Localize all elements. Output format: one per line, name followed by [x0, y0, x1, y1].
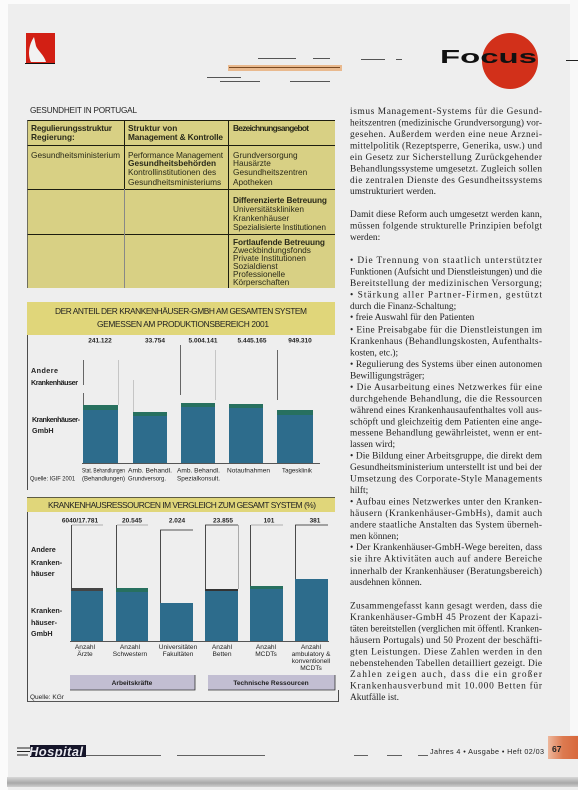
footer: page number block [548, 736, 578, 759]
article text column: • Regulierung des Systems über einen autonomen [350, 360, 542, 370]
table row: continuing care: Körperschaften [233, 277, 290, 287]
article text column: • Die Ausarbeitung eines Netzwerkes für eine [350, 382, 542, 393]
header rules and orange bar [207, 58, 402, 82]
article text column: • Der Krankenhäuser-GmbH-Wege bereiten, dass [350, 543, 542, 553]
category labels: Betten [212, 651, 232, 658]
table heading: GESUNDHEIT IN PORTUGAL [30, 106, 137, 115]
category labels: Stat. Behandlungen [82, 468, 125, 474]
article text column: innerhalb der Krankenhäuser (Beratungsbereich) [350, 566, 542, 577]
article text column: häusern (Krankenhäuser-GmbHs), damit auch [350, 508, 542, 519]
article text column: Zusammengefasst kann gesagt werden, dass die [350, 600, 542, 612]
table row: differentiated care [233, 195, 327, 232]
table row: ministry and primary care: Hausärzte [233, 158, 271, 168]
category labels: konventionell [292, 658, 331, 665]
button: Arbeitskräfte: Arbeitskräfte [112, 680, 153, 687]
top values: 5.004.141 [189, 338, 218, 344]
table row: ministry and primary care: Gesundheitszentren [233, 167, 308, 177]
chart title band: DER ANTEIL DER KRANKENHÄUSER-GMBH AM GESAMTEN SYSTEM [55, 306, 307, 316]
footer: page number block: 67 [552, 744, 562, 754]
series labels: Krankenhäuser- [32, 415, 81, 424]
category labels: MCDTs [255, 651, 278, 658]
table header row: Regierung: [31, 132, 75, 142]
article text column: schöpft und gleichzeitig dem Patienten eine ange- [350, 416, 542, 427]
chart title band: KRANKENHAUSRESSOURCEN IM VERGLEICH ZUM GESAMT SYSTEM (%) [48, 500, 316, 510]
top values: 241.122 [88, 338, 112, 344]
article text column: Zahlen zeigen auch, dass die ein großer [350, 669, 543, 680]
article text column: andere staatliche Anstalten das System überneh- [350, 520, 542, 530]
article text column: durch die Finanz-Schaltung; [350, 302, 456, 312]
category labels [82, 468, 313, 482]
chart title band: GEMESSEN AM PRODUKTIONSBEREICH 2001 [97, 319, 269, 329]
article text column: Bereitstellung der medizinischen Versorgung; [350, 279, 542, 289]
category labels: Notaufnahmen [227, 468, 270, 474]
icon: red flame logo [25, 33, 55, 64]
article text column: häusern Portugals) und 50 Prozent der beschäfti- [350, 635, 542, 646]
chart: share of hospital companies by product [27, 302, 335, 490]
series labels: Krankenhäuser [31, 378, 78, 387]
chart title band [27, 302, 335, 335]
article text column: Gesundheitsministerium unterstellt ist und bei der [350, 463, 543, 473]
table row: ministry and primary care: Gesundheitsbehörden [128, 158, 216, 168]
table row: continuing care: Sozialdienst [233, 261, 278, 271]
table row: differentiated care: Universitätskliniken [233, 204, 304, 214]
article text column: durchgehende Behandlung, die die Ressourcen [350, 394, 542, 404]
chart: hospital resources compared with total system [27, 497, 338, 702]
button: Technische Ressourcen [208, 675, 335, 690]
article text column: Krankenhäuser-GmbH 45 Prozent der Kapazi- [350, 613, 542, 623]
article text column: ismus Management-Systems für die Gesund- [350, 106, 542, 117]
article text column: • Die Bildung einer Arbeitsgruppe, die direkt dem [350, 452, 543, 462]
article text column: heitszentren (medizinische Grundversorgung) vor- [350, 118, 542, 128]
top values: 6040/17.781 [62, 518, 98, 524]
article text column: kosten, etc.); [350, 348, 398, 359]
article text column: Krankenhaus (Behandlungskosten, Aufenthalts- [350, 336, 542, 347]
series labels: häuser [31, 569, 55, 578]
article text column: lassen wird; [350, 440, 395, 450]
top values: 23.855 [213, 518, 233, 524]
article text column: während eines Krankenhausaufenthaltes voll aus- [350, 405, 542, 416]
table row: continuing care: Private Institutionen [233, 253, 306, 263]
top values: 5.445.165 [238, 338, 267, 344]
table header row: Management & Kontrolle [128, 132, 223, 142]
category labels: Ärzte [77, 650, 93, 658]
category labels: Schwestern [113, 651, 148, 658]
article text column: • Aufbau eines Netzwerkes unter den Kranken- [350, 496, 542, 507]
panel: health system table [27, 120, 335, 288]
top values [88, 338, 312, 344]
category labels: Anzahl [120, 644, 141, 651]
article text column: mittelpolitik (Rezeptsperre, Generika, usw.) und [350, 140, 542, 151]
category labels: Grundversorg. [128, 476, 166, 482]
table header row: Struktur von [128, 123, 177, 133]
article text column: nebenstehenden Tabellen detailliert gezeigt. Die [350, 659, 542, 669]
table row: ministry and primary care [31, 150, 308, 187]
bars [71, 579, 328, 641]
button: Technische Ressourcen: Technische Ressourcen [233, 680, 309, 687]
article text column: hilft; [350, 485, 368, 496]
table header row [31, 123, 309, 142]
table row: ministry and primary care: Performance Management [128, 150, 224, 160]
button: Arbeitskräfte [70, 675, 195, 690]
table row: continuing care: Professionelle [233, 269, 286, 279]
top values: 101 [264, 518, 275, 524]
top values: 20.545 [122, 518, 142, 524]
category labels: Anzahl [256, 644, 277, 651]
article text column: Akutfälle ist. [350, 692, 399, 703]
article text column: müssen folgende strukturelle Prinzipien befolgt [350, 221, 542, 232]
source note: Quelle: KGr [30, 694, 65, 701]
article text column: gten Leistungen. Diese Zahlen werden in den [350, 647, 542, 657]
article text column: ausdehnen können. [350, 578, 422, 588]
category labels [75, 644, 331, 672]
table row: ministry and primary care: Apotheken [233, 177, 273, 187]
article text column: Krankenhausverbund mit 10.000 Betten für [350, 681, 543, 692]
article text column: Damit diese Reform auch umgesetzt werden kann, [350, 209, 542, 220]
table header row: Bezeichnungsangebot [233, 123, 309, 133]
table row: continuing care: Fortlaufende Betreuung [233, 237, 325, 247]
bar outlines [72, 525, 328, 603]
category labels: Anzahl [212, 644, 233, 651]
article text column: • Stärkung aller Partner-Firmen, gestützt [350, 290, 542, 300]
article text column: Umsetzung des Corporate-Style Managements [350, 474, 542, 484]
category labels: (Behandlungen) [82, 476, 125, 482]
article text column: sie ihre Aktivitäten auch auf andere Bereiche [350, 554, 542, 565]
series labels [31, 366, 81, 435]
table row: ministry and primary care: Gesundheitsministeriums [128, 177, 221, 187]
table row: ministry and primary care: Kontrollinstitutionen des [128, 167, 216, 177]
article text column: täten bereitstellen (verglichen mit öffentl. Kranken- [350, 623, 542, 634]
top values: 381 [310, 518, 321, 524]
series labels: häuser- [31, 618, 58, 627]
top values [62, 518, 321, 524]
table row: ministry and primary care: Grundversorgung [233, 150, 298, 160]
section title: Focus with red circle [440, 33, 578, 89]
article text column: Funktionen (Aufsicht und Dienstleistungen) und die [350, 266, 542, 277]
article text column: men können; [350, 532, 399, 542]
category labels: Tagesklinik [282, 468, 313, 474]
category labels: ambulatory & [292, 651, 331, 658]
article text column: • freie Auswahl für den Patienten [350, 312, 475, 323]
category labels: Anzahl [75, 644, 96, 651]
series labels: Kranken- [31, 606, 63, 615]
top values: 33.754 [145, 338, 165, 344]
series labels [31, 545, 63, 638]
section title: Focus with red circle: Focus [440, 47, 537, 67]
category labels: Anzahl [301, 644, 322, 651]
table row: continuing care: Zweckbindungsfonds [233, 245, 311, 255]
footer: issue line: Jahres 4 • Ausgabe • Heft 02/03 [430, 747, 544, 756]
article text column: gesehen. Außerdem werden eine neue Arznei- [350, 129, 542, 140]
series labels: GmbH [31, 629, 53, 638]
article text column: • Die Trennung von staatlich unterstützter [350, 256, 543, 266]
article text column: Bewilligungsträger; [350, 372, 424, 382]
article text column: • Eine Preisabgabe für die Dienstleistungen im [350, 325, 543, 336]
article text column: umstrukturiert werden. [350, 187, 436, 197]
article text column: messene Behandlung gewährleistet, wenn er ent- [350, 429, 542, 439]
article text column: die zentralen Dienste des Gesundheitssystems [350, 176, 542, 186]
series labels: Andere [31, 545, 56, 554]
bars [83, 403, 313, 463]
table row: differentiated care: Differenzierte Betreuung [233, 195, 327, 205]
top values: 949.310 [288, 338, 312, 344]
table row: ministry and primary care: Gesundheitsministerium [31, 150, 120, 160]
table row: differentiated care: Krankenhäuser [233, 213, 290, 223]
category labels: Fakultäten [163, 651, 194, 658]
footer: Hospital logo: Hospital [29, 744, 83, 759]
article text column [350, 106, 543, 703]
series labels: Andere [31, 366, 58, 375]
article text column: Behandlungssysteme umgesetzt. Zugleich sollen [350, 164, 542, 174]
article text column: ein Gesetz zur Sicherstellung Zurückgehender [350, 153, 543, 163]
series labels: Kranken- [31, 558, 63, 567]
source note: Quelle: IGIF 2001 [30, 476, 75, 482]
chart title band [27, 497, 335, 512]
table header row: Regulierungsstruktur [31, 123, 113, 133]
top values: 2.024 [169, 518, 186, 524]
table row: continuing care [233, 237, 325, 287]
table row: differentiated care: Spezialisierte Institutionen [233, 222, 326, 232]
category labels: Spezialkonsult. [177, 476, 220, 482]
category labels: Amb. Behandl. [177, 468, 220, 474]
category labels: MCDTs [300, 665, 323, 672]
category labels: Amb. Behandl. [128, 468, 172, 474]
category labels: Universitäten [159, 644, 198, 651]
article text column: werden: [350, 233, 380, 243]
series labels: GmbH [32, 426, 54, 435]
